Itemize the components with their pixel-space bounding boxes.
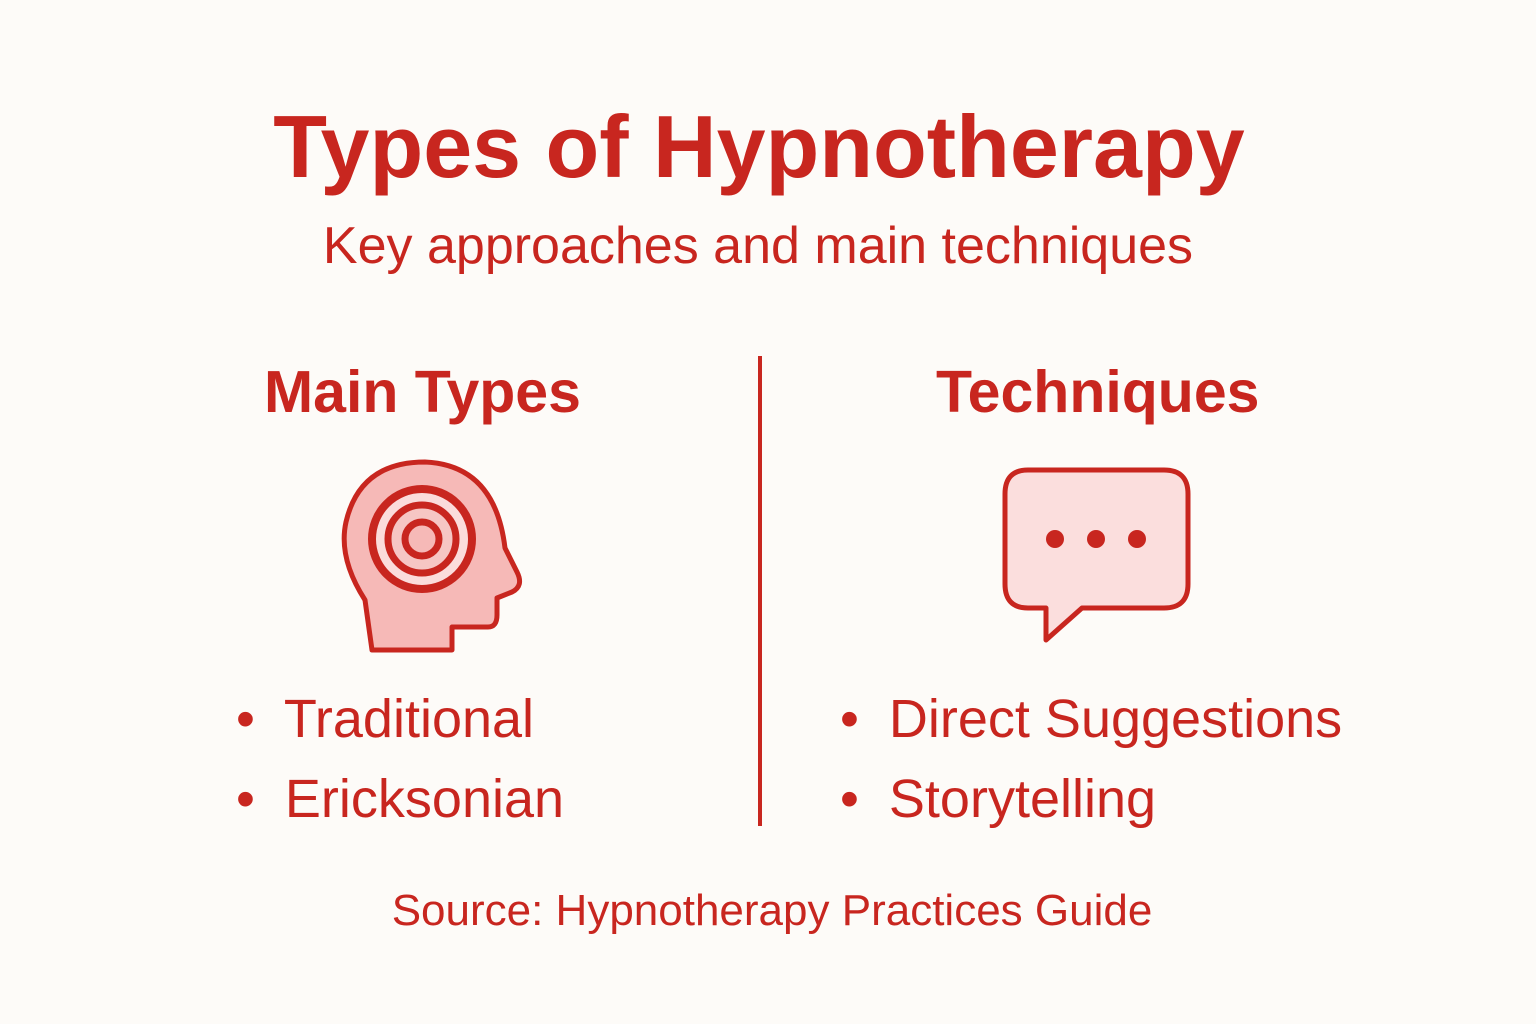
divider line xyxy=(758,356,762,826)
list: techniques xyxy=(840,689,1342,829)
list: main types: • Ericksonian xyxy=(236,769,564,829)
source: Source: Hypnotherapy Practices Guide xyxy=(392,886,1152,935)
heading: main types: Main Types xyxy=(264,359,581,425)
subtitle: Key approaches and main techniques xyxy=(323,217,1193,275)
list: techniques: • Direct Suggestions xyxy=(840,689,1342,749)
list: main types xyxy=(236,689,564,829)
list: main types: • Traditional xyxy=(236,689,534,749)
title: Types of Hypnotherapy xyxy=(273,97,1245,196)
list: techniques: • Storytelling xyxy=(840,769,1156,829)
heading: techniques: Techniques xyxy=(936,359,1259,425)
